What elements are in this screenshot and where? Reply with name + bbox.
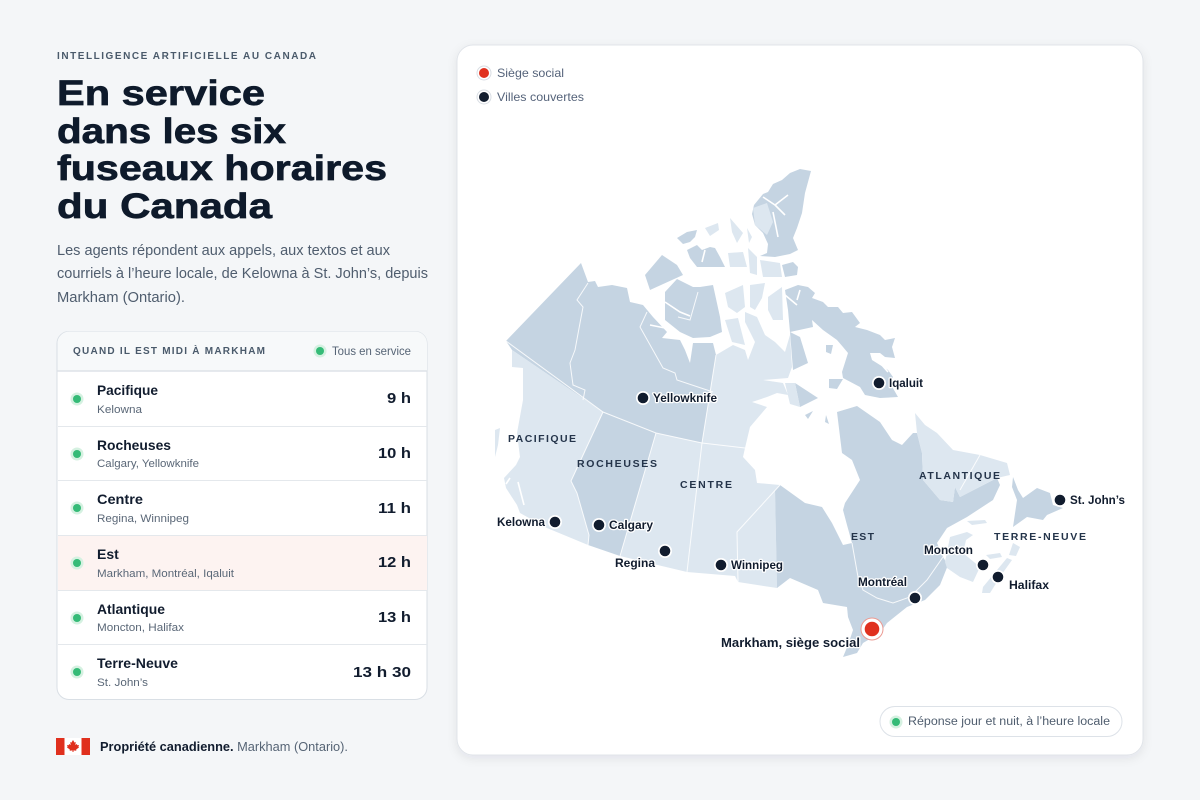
- map of Canada: ATLANTIQUE: [919, 470, 1000, 482]
- Arctic islands: [752, 169, 811, 257]
- zone boundaries: [506, 341, 745, 448]
- map of Canada: CENTRE: [680, 479, 732, 491]
- row: Rocheuses: Rocheuses: [97, 437, 171, 453]
- marker: Markham headquarters: [721, 618, 883, 650]
- region: Pacifique: [504, 350, 603, 545]
- title: du Canada: [57, 186, 272, 226]
- table header: [58, 332, 427, 371]
- row: Centre: 11 h: [378, 500, 411, 517]
- marker: Iqaluit: [872, 376, 923, 390]
- marker: St. John's: St. John’s: [1070, 493, 1125, 507]
- marker: Moncton: [924, 543, 990, 572]
- row: Est: Est: [97, 546, 119, 562]
- legend: [477, 66, 584, 104]
- intro paragraph: courriels à l’heure locale, de Kelowna à St. John’s, depuis: [57, 266, 428, 282]
- region: Labrador: [915, 413, 1010, 502]
- title: [57, 73, 387, 226]
- status pill: Réponse jour et nuit, à l’heure locale: [908, 716, 1110, 728]
- panel: time zone table: [57, 332, 427, 700]
- row: Est: 12 h: [378, 554, 411, 571]
- region: Est: [775, 406, 1000, 657]
- marker: Regina: [615, 544, 672, 570]
- row: Centre: Centre: [97, 491, 143, 507]
- highlighted row background: [58, 536, 427, 590]
- Pacific islands: [495, 428, 500, 457]
- title: dans les six: [57, 111, 286, 151]
- legend: Siège social: [497, 66, 564, 80]
- row: Est: Markham, Montréal, Iqaluit: [97, 568, 234, 580]
- ownership note: Propriété canadienne. Markham (Ontario).: [100, 740, 348, 754]
- marker: Calgary: Calgary: [609, 518, 653, 532]
- zone labels: PACIFIQUE: [508, 433, 576, 445]
- region: Centre north: [702, 312, 792, 448]
- legend: Villes couvertes: [497, 90, 584, 104]
- intro paragraph: Les agents répondent aux appels, aux textos et aux: [57, 243, 391, 259]
- row: Atlantique: Moncton, Halifax: [97, 622, 185, 634]
- row: Centre: Regina, Winnipeg: [97, 513, 189, 525]
- marker: Yellowknife: Yellowknife: [653, 391, 717, 405]
- status pill: [880, 706, 1122, 736]
- marker: Regina: Regina: [615, 556, 655, 570]
- table header: QUAND IL EST MIDI À MARKHAM: [73, 344, 265, 357]
- region: Rocheuses: [571, 412, 656, 556]
- map of Canada: TERRE-NEUVE: [994, 531, 1086, 543]
- title: fuseaux horaires: [57, 148, 387, 188]
- row: Pacifique: [70, 382, 411, 416]
- row: Rocheuses: 10 h: [378, 445, 411, 462]
- marker: Halifax: Halifax: [1009, 578, 1049, 592]
- region: Centre: [620, 433, 780, 588]
- row: Rocheuses: Calgary, Yellowknife: [97, 458, 199, 470]
- row: Est: [70, 546, 411, 580]
- row: Pacifique: Kelowna: [97, 404, 143, 416]
- row: Terre-Neuve: St. John’s: [97, 677, 149, 689]
- marker: Iqaluit: Iqaluit: [889, 376, 923, 390]
- marker: Markham headquarters: Markham, siège social: [721, 635, 860, 650]
- row: Atlantique: 13 h: [378, 609, 411, 626]
- marker: Halifax: [991, 570, 1049, 592]
- intro paragraph: [57, 243, 428, 306]
- marker: Montréal: [858, 575, 922, 605]
- row: Terre-Neuve: [70, 655, 411, 689]
- row: Pacifique: 9 h: [387, 390, 411, 407]
- marker: Moncton: Moncton: [924, 543, 973, 557]
- eyebrow: INTELLIGENCE ARTIFICIELLE AU CANADA: [57, 51, 316, 62]
- region: north dark: [506, 263, 716, 443]
- marker: Winnipeg: Winnipeg: [731, 558, 783, 572]
- fjords and inlets: [763, 195, 800, 305]
- map of Canada: ROCHEUSES: [577, 458, 657, 470]
- row: Terre-Neuve: Terre-Neuve: [97, 655, 178, 671]
- title: En service: [57, 73, 265, 113]
- map of Canada: [495, 169, 1125, 657]
- row: Centre: [70, 491, 411, 525]
- table header: Tous en service: [332, 346, 411, 358]
- region: New Brunswick, Nova Scotia, PEI: [945, 532, 980, 582]
- marker: Montréal: Montréal: [858, 575, 907, 589]
- intro paragraph: Markham (Ontario).: [57, 290, 185, 306]
- row: Pacifique: Pacifique: [97, 382, 158, 398]
- row: Atlantique: [70, 601, 411, 634]
- marker: Kelowna: Kelowna: [497, 515, 545, 529]
- icon: Canadian flag: [56, 738, 90, 755]
- map of Canada: EST: [851, 531, 875, 543]
- panel: map card: [457, 45, 1143, 755]
- region: Newfoundland: [1012, 477, 1063, 527]
- row: Rocheuses: [70, 437, 411, 470]
- row: Atlantique: Atlantique: [97, 601, 165, 617]
- row: Terre-Neuve: 13 h 30: [353, 664, 411, 681]
